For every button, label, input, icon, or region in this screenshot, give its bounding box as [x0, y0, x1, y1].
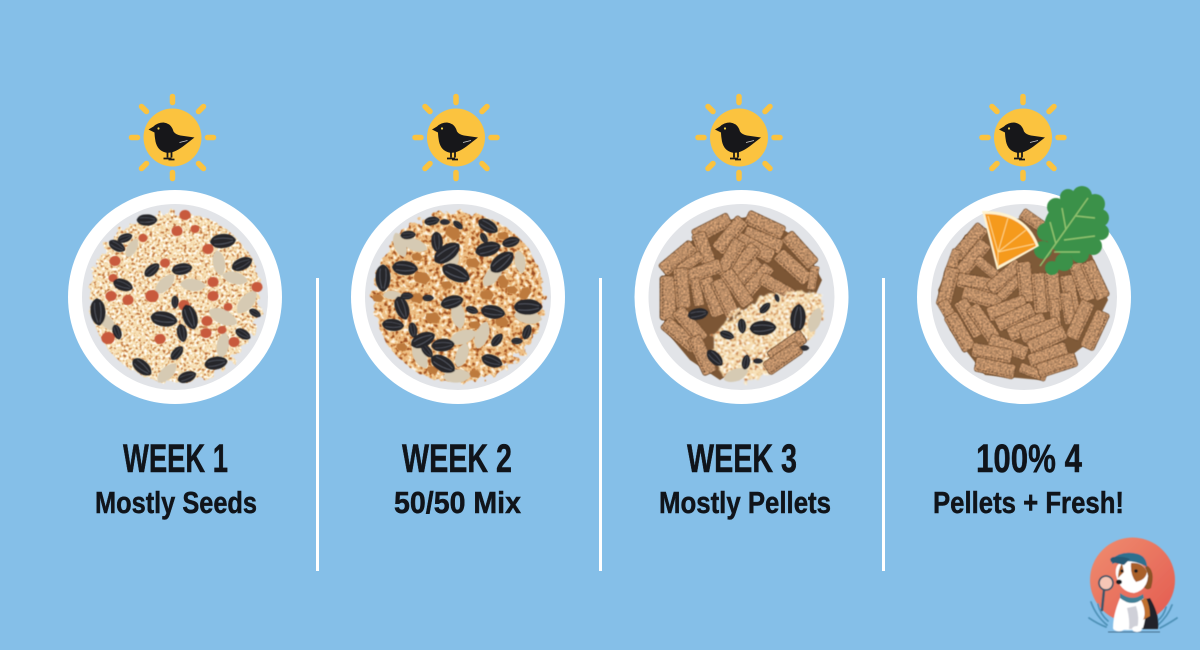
plate: mostly pellets [634, 190, 848, 404]
panel: week 3 [634, 96, 848, 520]
logo: beagle with magnifying glass [1089, 538, 1177, 632]
label: week 3: Mostly Pellets [659, 485, 831, 520]
dividers [316, 278, 885, 571]
icon: sun with bird [982, 96, 1064, 178]
pellets over wedge [762, 330, 808, 375]
label: week 4: 100% 4 [976, 437, 1083, 481]
label: week 2: 50/50 Mix [394, 485, 522, 520]
label: week 4: Pellets + Fresh! [933, 485, 1124, 520]
panel: week 4 [917, 96, 1131, 520]
panel: week 1 [68, 96, 282, 520]
icon: sun with bird [698, 96, 780, 178]
icon: orange slice [982, 211, 1039, 270]
plate: pellets and fresh food [917, 186, 1131, 404]
label: week 4 [933, 437, 1124, 520]
icon: kale leaf [1034, 186, 1109, 275]
label: week 2 [394, 437, 522, 520]
panel: week 2 [351, 96, 565, 520]
label: week 3: WEEK 3 [687, 437, 797, 481]
plate: 50/50 mix [351, 190, 565, 404]
label: week 1: Mostly Seeds [95, 485, 257, 520]
plate: mostly seeds [68, 190, 282, 404]
label: week 1 [95, 437, 257, 520]
seed wedge [687, 290, 825, 385]
label: week 2: WEEK 2 [402, 437, 512, 481]
label: week 3 [659, 437, 831, 520]
icon: sun with bird [132, 96, 214, 178]
icon: sun with bird [415, 96, 497, 178]
label: week 1: WEEK 1 [123, 437, 228, 481]
